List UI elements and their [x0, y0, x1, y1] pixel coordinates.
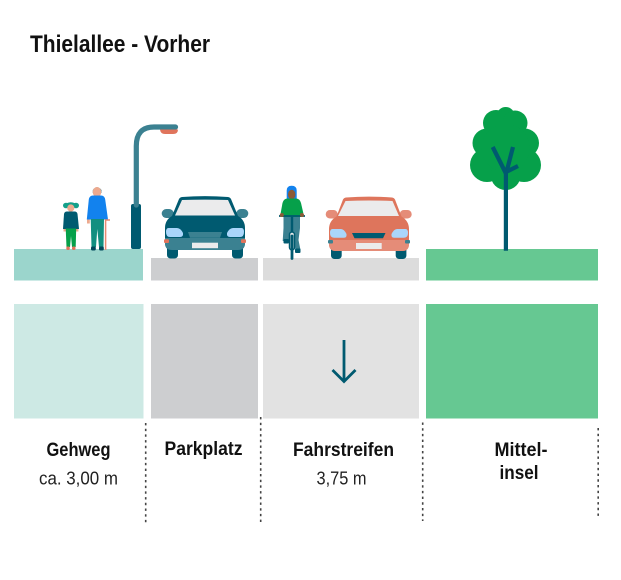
label: Mittelinsel [494, 440, 548, 484]
icon: elderly pedestrian with cane [87, 187, 110, 250]
icon: dark teal car [162, 196, 248, 258]
icon: street lamp [131, 127, 178, 249]
label: Mittelinsel: Mittel- [494, 440, 548, 461]
label: Gehweg: ca. 3,00 m [39, 468, 118, 488]
label: Fahrstreifen [293, 440, 394, 488]
plan view: lane blocks [14, 304, 598, 418]
street cross-section: ground strips [14, 249, 598, 280]
icon: tree [470, 107, 541, 251]
icon: child pedestrian [63, 202, 79, 250]
dotted dividers [146, 417, 598, 524]
label: Fahrstreifen: 3,75 m [316, 468, 366, 488]
icon: coral car [326, 197, 412, 259]
label: Parkplatz: Parkplatz [164, 439, 242, 460]
icon: direction arrow [332, 340, 356, 382]
label: Fahrstreifen: Fahrstreifen [293, 440, 394, 461]
label: Gehweg: Gehweg [46, 440, 110, 461]
label: Mittelinsel: insel [500, 463, 538, 484]
label: Gehweg [39, 440, 118, 488]
icon: cyclist [279, 186, 305, 258]
title: Thielallee - Vorher [30, 31, 210, 58]
